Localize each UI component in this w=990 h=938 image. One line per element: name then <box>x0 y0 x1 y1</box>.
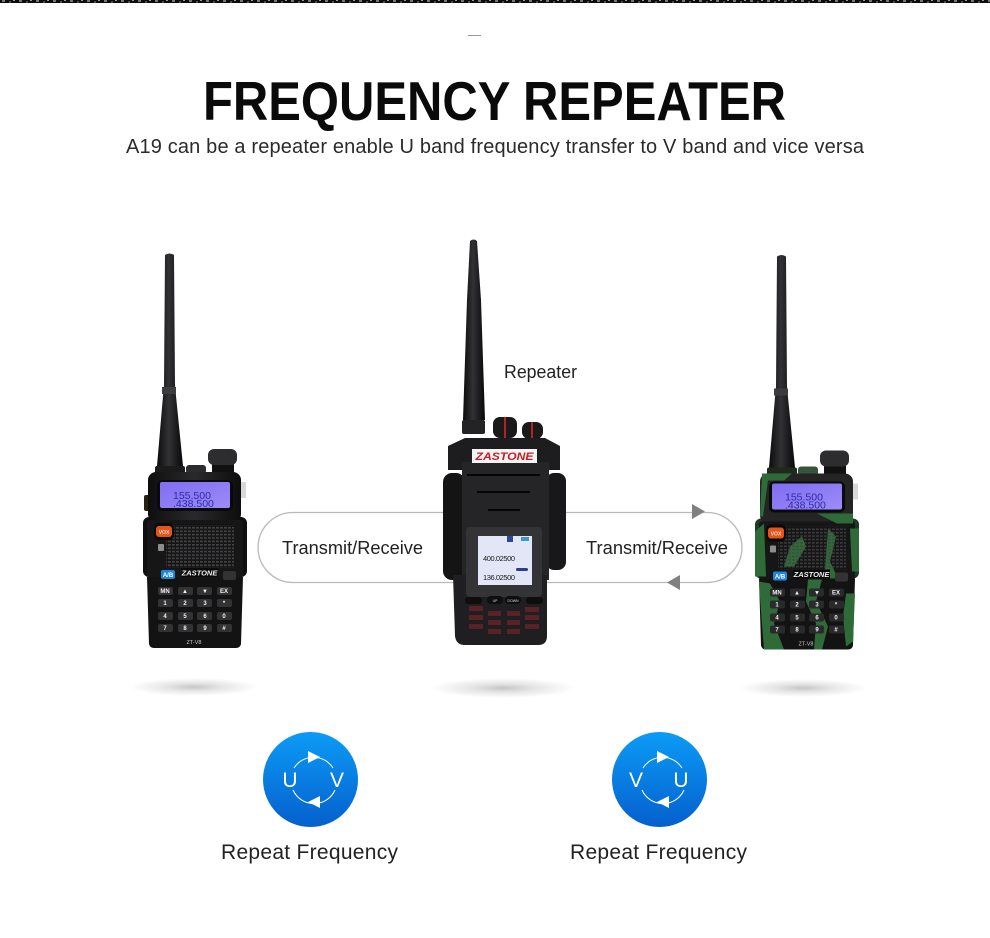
center repeater radio: UP <box>493 599 498 603</box>
right camouflage radio <box>755 255 859 650</box>
left radio: 3 <box>203 601 207 607</box>
left radio: ZASTONE <box>181 568 218 578</box>
left radio: 8 <box>183 626 187 632</box>
right camouflage radio: 1 <box>775 602 779 608</box>
right camouflage radio: A/B <box>775 574 786 580</box>
signal loop connector <box>258 512 742 582</box>
left radio: 5 <box>183 614 187 620</box>
right camouflage radio: 7 <box>775 628 779 634</box>
icon: U to V repeat: V <box>330 769 344 792</box>
right camouflage radio: 6 <box>815 616 819 622</box>
center repeater radio: ZASTONE <box>474 451 534 463</box>
right camouflage radio: * <box>835 602 838 608</box>
shadow: right radio <box>739 679 867 697</box>
center repeater radio: 400.02500 <box>483 554 515 563</box>
label: repeater: Repeater <box>504 362 577 382</box>
left radio: VOX <box>159 530 170 536</box>
right camouflage radio: 2 <box>795 602 799 608</box>
left radio <box>143 254 247 648</box>
right camouflage radio: # <box>834 628 838 634</box>
arrow: toward right radio <box>692 504 705 519</box>
right camouflage radio: ▲ <box>794 590 800 596</box>
label: right transmit/receive: Transmit/Receive <box>586 537 728 558</box>
left radio: 2 <box>183 601 187 607</box>
right camouflage radio: 0 <box>834 616 838 622</box>
arrow: toward center radio <box>667 575 680 590</box>
icon: V to U repeat <box>612 732 707 827</box>
left radio: 155.500 <box>173 490 211 502</box>
left radio: MN <box>160 589 170 595</box>
subtitle: A19 can be a repeater enable U band frequency transfer to V band and vice versa <box>126 136 865 158</box>
center repeater radio <box>443 240 566 645</box>
icon: V to U repeat: U <box>673 769 689 792</box>
right camouflage radio: MN <box>772 590 782 596</box>
right camouflage radio: ZASTONE <box>793 570 830 579</box>
left radio: ZT-V8 <box>187 640 201 646</box>
camouflage patches <box>755 474 859 650</box>
center repeater radio: DOWN <box>507 599 519 603</box>
left radio: 4 <box>163 614 167 620</box>
shadow: left radio <box>130 678 258 696</box>
left radio: 7 <box>163 626 167 632</box>
left radio: 6 <box>203 614 207 620</box>
right camouflage radio: 5 <box>795 616 799 622</box>
right camouflage radio: 3 <box>815 602 819 608</box>
right camouflage radio: .438.500 <box>785 500 826 512</box>
right camouflage radio: 155.500 <box>785 492 823 504</box>
right camouflage radio: 9 <box>815 628 819 634</box>
caption: left repeat frequency: Repeat Frequency <box>221 841 398 864</box>
top textured stripe <box>0 0 990 3</box>
title: FREQUENCY REPEATER <box>203 71 786 132</box>
right camouflage radio: EX <box>832 590 840 596</box>
left radio: A/B <box>163 573 174 579</box>
left radio: 1 <box>163 601 167 607</box>
center repeater radio: 136.02500 <box>483 573 515 582</box>
icon: U to V repeat <box>263 732 358 827</box>
right camouflage radio: ▼ <box>814 590 820 596</box>
right camouflage radio: VOX <box>771 532 782 538</box>
left radio: .438.500 <box>173 498 214 510</box>
caption: right repeat frequency: Repeat Frequency <box>570 841 748 864</box>
icon: V to U repeat: V <box>629 769 643 792</box>
left radio: 9 <box>203 626 207 632</box>
small dash mark <box>468 35 481 36</box>
left radio: # <box>222 626 226 632</box>
left radio: 0 <box>222 614 226 620</box>
left radio: ▼ <box>202 589 208 595</box>
right camouflage radio: 8 <box>795 628 799 634</box>
icon: U to V repeat: U <box>282 769 298 792</box>
label: left transmit/receive: Transmit/Receive <box>282 537 423 558</box>
right camouflage radio: ZT-V8 <box>799 642 813 648</box>
left radio: * <box>223 601 226 607</box>
shadow: center radio <box>431 678 575 698</box>
right camouflage radio: 4 <box>775 616 779 622</box>
left radio: EX <box>220 589 228 595</box>
left radio: ▲ <box>182 589 188 595</box>
